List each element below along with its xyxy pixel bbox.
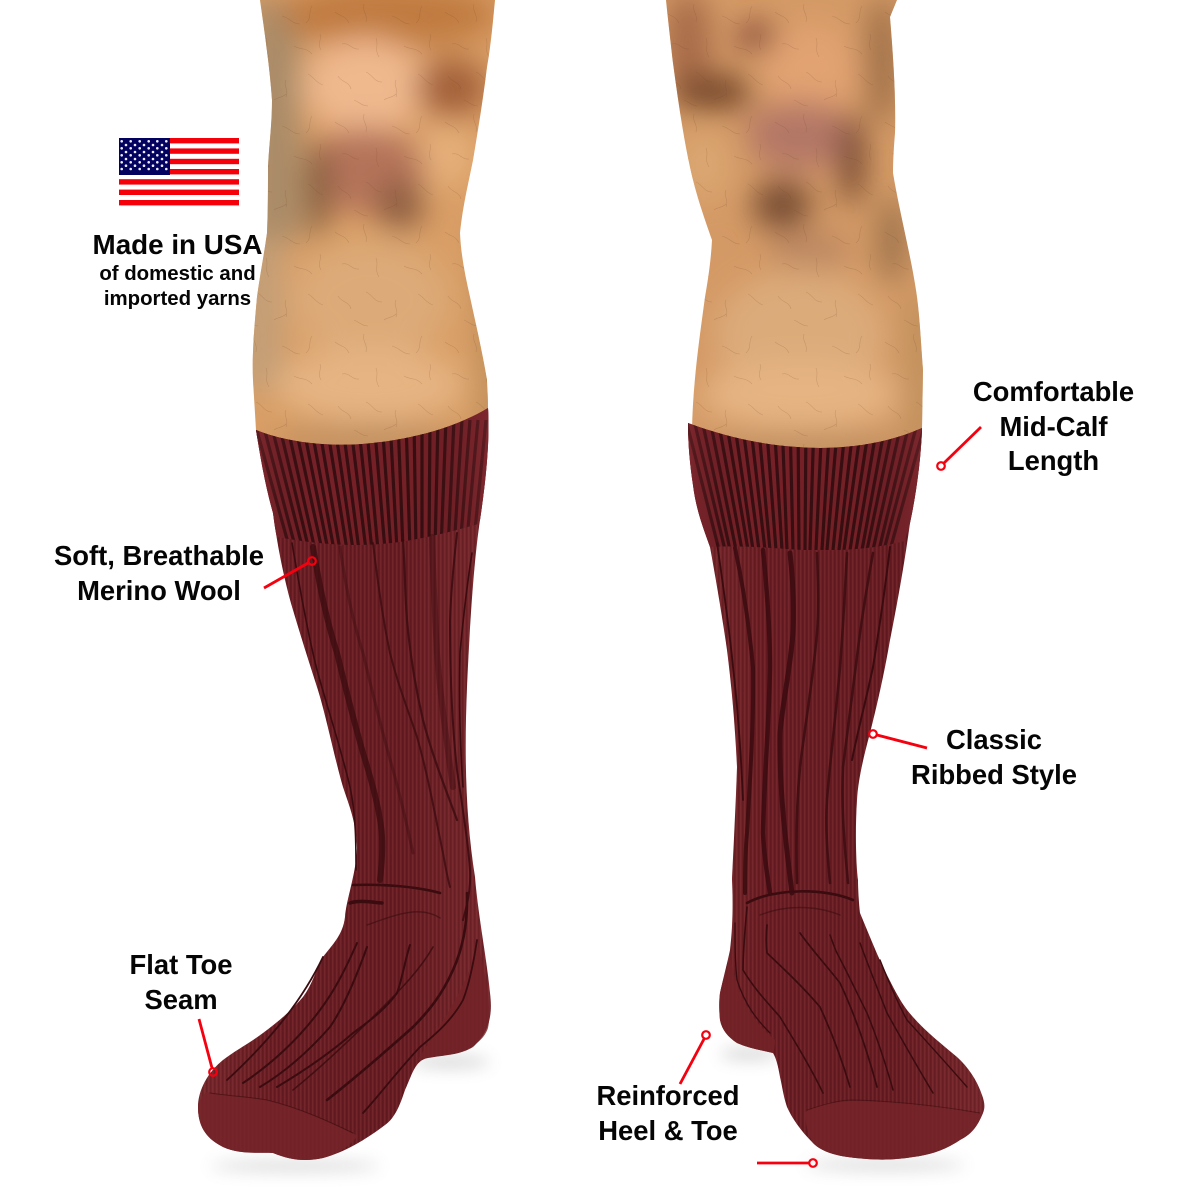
callout: Soft, Breathable Merino Wool: Soft, Breathable (54, 540, 264, 571)
callout: Reinforced Heel & Toe (596, 1031, 817, 1167)
text: Made in USA (93, 229, 262, 310)
left sock knit texture (198, 408, 491, 1160)
right leg skin (666, 0, 923, 448)
callout: Comfortable Mid-Calf Length: Comfortable (973, 376, 1134, 407)
callout: Comfortable Mid-Calf Length: Mid-Calf (999, 411, 1108, 442)
text: Made in USA: imported yarns (104, 288, 251, 310)
left leg (198, 0, 510, 1160)
left sock heel (418, 945, 489, 1060)
callout: Flat Toe Seam: Seam (144, 984, 218, 1015)
right leg (660, 0, 984, 1160)
icon: American flag (119, 138, 239, 206)
callout: Classic Ribbed Style (869, 724, 1077, 790)
left sock toe cap (198, 1092, 358, 1160)
text: Made in USA: Made in USA (93, 229, 262, 260)
callout: Soft, Breathable Merino Wool: Merino Wool (77, 575, 241, 606)
callout: Flat Toe Seam (130, 949, 232, 1076)
callout: Classic Ribbed Style: Ribbed Style (911, 759, 1077, 790)
foot shadows (210, 1048, 965, 1171)
right cuff (688, 423, 922, 550)
callout: Comfortable Mid-Calf Length: Length (1008, 445, 1099, 476)
callout: Classic Ribbed Style: Classic (946, 724, 1042, 755)
callout: Reinforced Heel & Toe: Reinforced (596, 1080, 740, 1111)
right sock knit texture (688, 423, 984, 1160)
right sock heel (719, 955, 775, 1053)
callout: Comfortable Mid-Calf Length (937, 376, 1134, 476)
callout: Reinforced Heel & Toe: Heel & Toe (598, 1115, 738, 1146)
text: Made in USA: of domestic and (99, 263, 256, 285)
left cuff (256, 408, 488, 545)
left sock ribs (210, 533, 477, 1133)
callout: Soft, Breathable Merino Wool (54, 540, 316, 606)
left leg skin (252, 0, 495, 445)
callout: Flat Toe Seam: Flat Toe (130, 949, 232, 980)
left sock (198, 408, 491, 1160)
right sock (688, 423, 984, 1160)
right sock ribs (717, 543, 980, 1113)
right sock toe cap (805, 1101, 982, 1160)
